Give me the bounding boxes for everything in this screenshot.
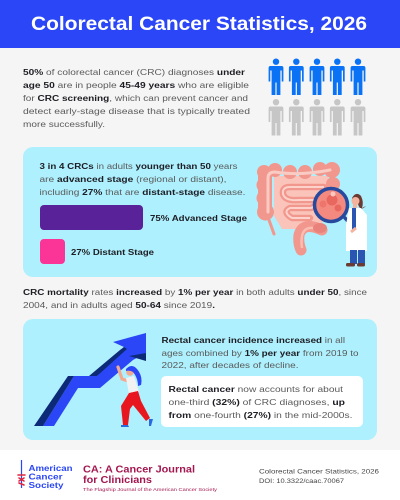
- panel text: Rectal cancer incidence increased in all: [162, 335, 345, 345]
- logo: American Cancer Society: [18, 460, 72, 490]
- panel text: ages combined by 1% per year from 2019 to: [162, 348, 359, 358]
- icon array: people, 5 blue and 5 gray: [269, 58, 365, 136]
- panel text: [40, 161, 246, 197]
- panel text: 2022, after decades of decline.: [162, 360, 298, 370]
- bar: 75% advanced stage: [40, 205, 247, 230]
- illustration: magnifying glass: [314, 188, 354, 228]
- logo: CA journal: [83, 464, 218, 492]
- bar: 27% distant stage: 27% Distant Stage: [71, 247, 154, 257]
- callout: one-third of diagnoses: from one-fourth (27%) in the mid-2000s.: [168, 410, 352, 420]
- logo: American Cancer Society: Cancer: [28, 472, 63, 482]
- title banner: [0, 0, 400, 48]
- panel text: including 27% that are distant-stage disease.: [40, 187, 246, 197]
- illustration: rising arrow: [34, 333, 146, 426]
- citation: Colorectal Cancer Statistics, 2026: [259, 468, 379, 476]
- text block: early-onset screening: more successfully.: [23, 119, 105, 129]
- callout: one-third of diagnoses: [161, 376, 363, 427]
- callout: one-third of diagnoses: one-third (32%) of CRC diagnoses, up: [168, 397, 345, 407]
- panel text: [162, 335, 359, 370]
- illustration: woman pushing arrow: [118, 366, 153, 427]
- panel text: are advanced stage (regional or distant),: [40, 174, 226, 184]
- citation: [259, 468, 379, 485]
- text block: mortality rates: [23, 287, 367, 310]
- bar: 27% distant stage: [40, 239, 154, 264]
- illustration: doctor: [346, 194, 367, 266]
- logo: American Cancer Society: American: [28, 463, 72, 473]
- text block: mortality rates: CRC mortality rates increased by 1% per year in both adults under 50 , since: [23, 287, 367, 297]
- logo: CA journal: for Clinicians: [83, 475, 152, 486]
- panel: advanced stage: [23, 147, 377, 277]
- text block: early-onset screening: for CRC screening , which can prevent cancer and: [23, 93, 248, 103]
- citation: DOI: 10.3322/caac.70067: [259, 478, 344, 485]
- logo: American Cancer Society: Society: [28, 480, 64, 490]
- text block: early-onset screening: 50% of colorectal cancer (CRC) diagnoses under: [23, 67, 246, 77]
- bar: 75% advanced stage: 75% Advanced Stage: [150, 213, 247, 223]
- text block: early-onset screening: age 50 are in people 45-49 years who are eligible: [23, 80, 249, 90]
- text block: early-onset screening: detect early-stage disease that is typically treated: [23, 106, 250, 116]
- title banner: Colorectal Cancer Statistics, 2026: [31, 13, 367, 35]
- illustration: colon: [256, 162, 340, 250]
- panel text: 3 in 4 CRCs in adults younger than 50 years: [40, 161, 238, 171]
- logo: CA journal: The Flagship Journal of the American Cancer Society: [83, 487, 218, 492]
- text block: mortality rates: 2004, and in adults aged 50-64 since 2019 .: [23, 300, 215, 310]
- panel: rectal cancer: [23, 319, 377, 440]
- text block: early-onset screening: [23, 67, 250, 129]
- callout: one-third of diagnoses: Rectal cancer now accounts for about: [168, 384, 344, 394]
- logo: CA journal: CA: A Cancer Journal: [83, 464, 195, 476]
- footer: [0, 450, 400, 500]
